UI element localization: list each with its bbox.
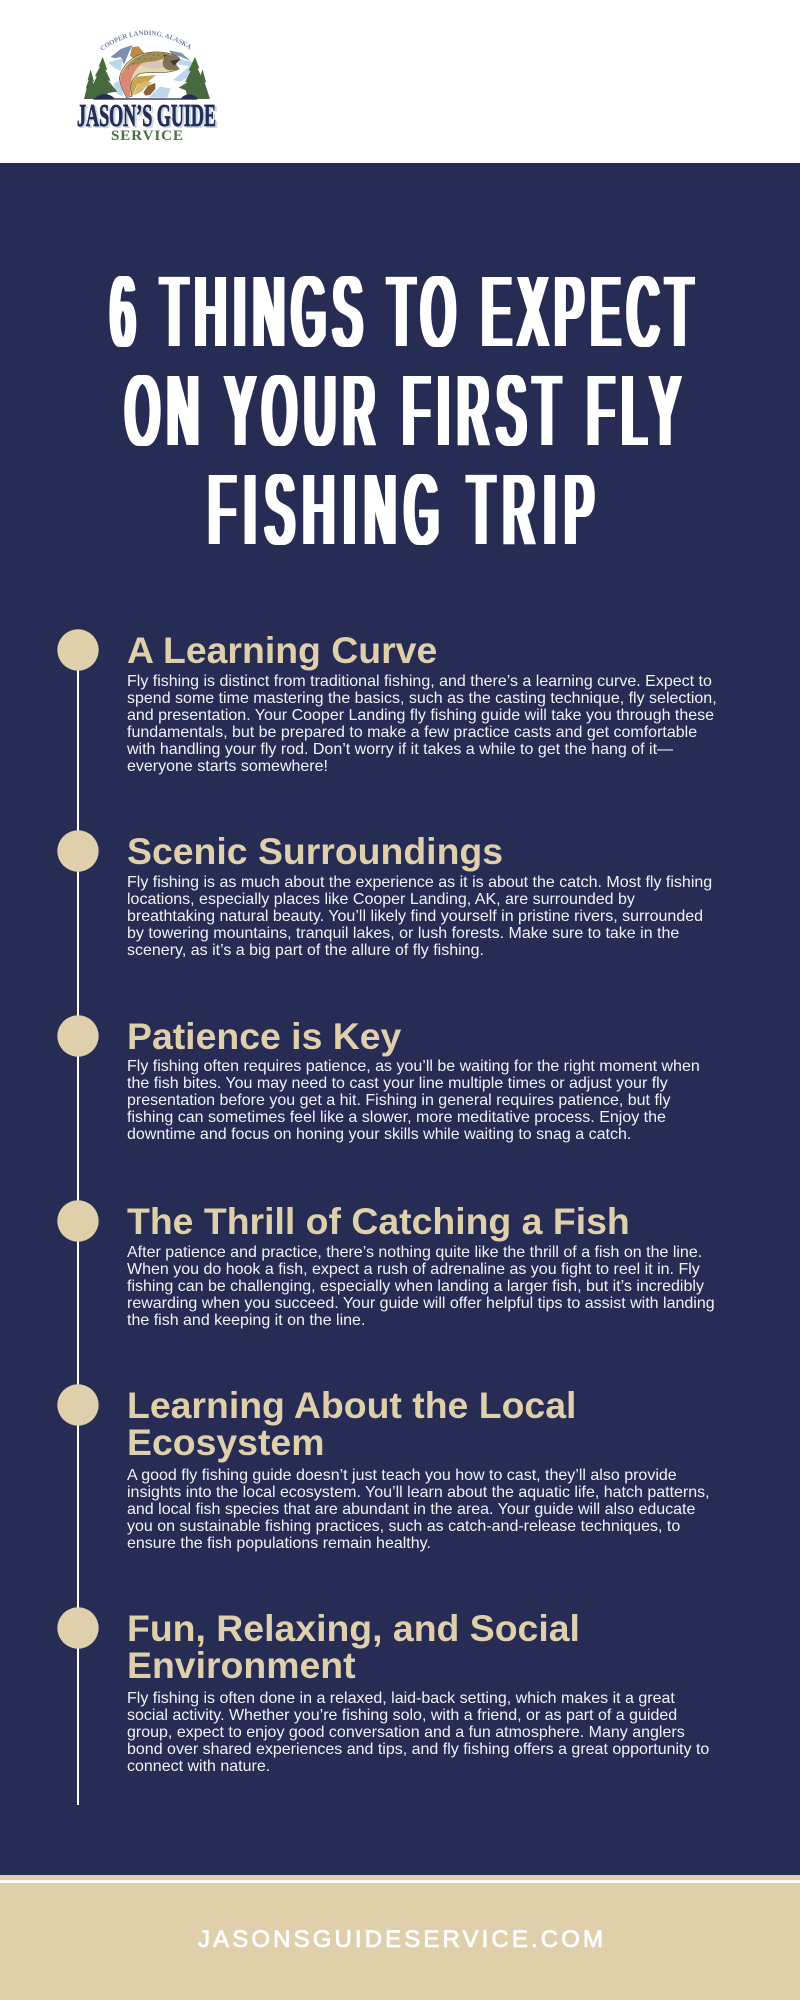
body 1: Fly fishing is distinct from traditional fishing, and there’s a learning curve. Expect to <box>127 673 712 690</box>
icon: pine trees <box>84 57 210 99</box>
body 2: Fly fishing is as much about the experience as it is about the catch. Most fly fishing <box>127 874 712 891</box>
title: 6 THINGS TO EXPECT <box>111 256 692 368</box>
icon: ground line with rocks <box>93 94 198 100</box>
body 6: Fly fishing is often done in a relaxed, laid-back setting, which makes it a great <box>127 1690 675 1707</box>
section 5: Learning About the Local Ecosystem <box>57 1384 710 1552</box>
body 1: fundamentals, but be prepared to make a few practice casts and get comfortable <box>127 724 697 741</box>
icon: mountains <box>111 45 191 64</box>
body 4: the fish and keeping it on the line. <box>127 1312 365 1329</box>
heading 5: Learning About the Local <box>127 1384 576 1426</box>
body 6: group, expect to enjoy good conversation and a fun atmosphere. Many anglers <box>127 1724 685 1741</box>
body 2: by towering mountains, tranquil lakes, or lush forests. Make sure to take in the <box>127 925 679 942</box>
body 3: fishing can sometimes feel like a slower, more meditative process. Enjoy the <box>127 1109 666 1126</box>
timeline marker 4 <box>57 1200 99 1242</box>
heading 6: Environment <box>127 1644 356 1686</box>
body 5: insights into the local ecosystem. You’ll learn about the aquatic life, hatch patterns, <box>127 1484 710 1501</box>
body 5: ensure the fish populations remain healthy. <box>127 1535 431 1552</box>
body 4 <box>127 1244 715 1329</box>
logo wordmark shadow: JASON’S GUIDE <box>79 98 218 134</box>
body 6: bond over shared experiences and tips, and fly fishing offers a great opportunity to <box>127 1741 709 1758</box>
heading 6 <box>127 1607 580 1686</box>
body 5: you on sustainable fishing practices, such as catch-and-release techniques, to <box>127 1518 680 1535</box>
body 5: A good fly fishing guide doesn’t just teach you how to cast, they’ll also provide <box>127 1467 677 1484</box>
title <box>111 256 692 566</box>
logo: Jason's Guide Service: COOPER LANDING, ALASKA <box>100 30 190 50</box>
icon: water splash <box>108 58 195 98</box>
heading 1: A Learning Curve <box>127 629 437 671</box>
section 3: Patience is Key <box>57 1015 700 1143</box>
body 1: and presentation. Your Cooper Landing fly fishing guide will take you through these <box>127 707 714 724</box>
heading 3: Patience is Key <box>127 1015 402 1057</box>
body 1: spend some time mastering the basics, such as the casting technique, fly selection, <box>127 690 717 707</box>
heading 5: Ecosystem <box>127 1421 324 1463</box>
body 4: fishing can be challenging, especially when landing a larger fish, but it’s incredibly <box>127 1278 704 1295</box>
section 1: A Learning Curve <box>57 629 717 775</box>
body 3: presentation before you get a hit. Fishing in general requires patience, but fly <box>127 1092 670 1109</box>
body 3: the fish bites. You may need to cast your line multiple times or adjust your fly <box>127 1075 668 1092</box>
timeline marker 6 <box>57 1607 99 1649</box>
title: ON YOUR FIRST FLY <box>126 355 680 467</box>
logo arc text <box>102 35 192 51</box>
body 1 <box>126 673 717 775</box>
body 3: Fly fishing often requires patience, as you’ll be waiting for the right moment when <box>127 1058 700 1075</box>
heading 2: Scenic Surroundings <box>127 830 503 872</box>
logo subtitle: SERVICE <box>111 128 183 144</box>
timeline marker 1 <box>57 629 99 671</box>
timeline line <box>77 650 79 1805</box>
timeline marker 3 <box>57 1015 99 1057</box>
section 4: The Thrill of Catching a Fish <box>57 1200 715 1329</box>
body 6: connect with nature. <box>127 1758 270 1775</box>
body 2: locations, especially places like Cooper Landing, AK, are surrounded by <box>127 891 635 908</box>
body 2: breathtaking natural beauty. You’ll likely find yourself in pristine rivers, surrounded <box>127 908 703 925</box>
timeline marker 2 <box>57 830 99 872</box>
header band <box>0 0 800 163</box>
section 6: Fun, Relaxing, and Social Environment <box>57 1607 709 1775</box>
body 3: downtime and focus on honing your skills while waiting to snag a catch. <box>127 1126 631 1143</box>
body 5: and local fish species that are abundant in the area. Your guide will also educate <box>127 1501 695 1518</box>
heading 6: Fun, Relaxing, and Social <box>127 1607 580 1649</box>
body 6: social activity. Whether you’re fishing solo, with a friend, or as part of a guided <box>127 1707 677 1724</box>
body 5 <box>127 1467 710 1552</box>
icon: leaping trout <box>119 46 181 98</box>
body 1: with handling your fly rod. Don’t worry if it takes a while to get the hang of it— <box>126 741 673 758</box>
body 2 <box>127 874 712 959</box>
body 6 <box>127 1690 709 1775</box>
body 1: everyone starts somewhere! <box>127 758 328 775</box>
body 3 <box>127 1058 700 1143</box>
timeline marker 5 <box>57 1384 99 1426</box>
body 4: rewarding when you succeed. Your guide will offer helpful tips to assist with landing <box>127 1295 715 1312</box>
body 2: scenery, as it’s a big part of the allure of fly fishing. <box>127 942 484 959</box>
section 2: Scenic Surroundings <box>57 830 712 959</box>
heading 4: The Thrill of Catching a Fish <box>127 1200 630 1242</box>
logo: Jason's Guide Service <box>77 30 218 144</box>
body 4: When you do hook a fish, expect a rush of adrenaline as you fight to reel it in. Fly <box>127 1261 700 1278</box>
logo wordmark: JASON’S GUIDE <box>77 97 216 133</box>
footer url: JASONSGUIDESERVICE.COM <box>198 1926 603 1953</box>
body 4: After patience and practice, there’s nothing quite like the thrill of a fish on the line. <box>127 1244 702 1261</box>
title: FISHING TRIP <box>209 454 594 566</box>
footer band <box>0 1875 800 2000</box>
heading 5 <box>127 1384 576 1463</box>
